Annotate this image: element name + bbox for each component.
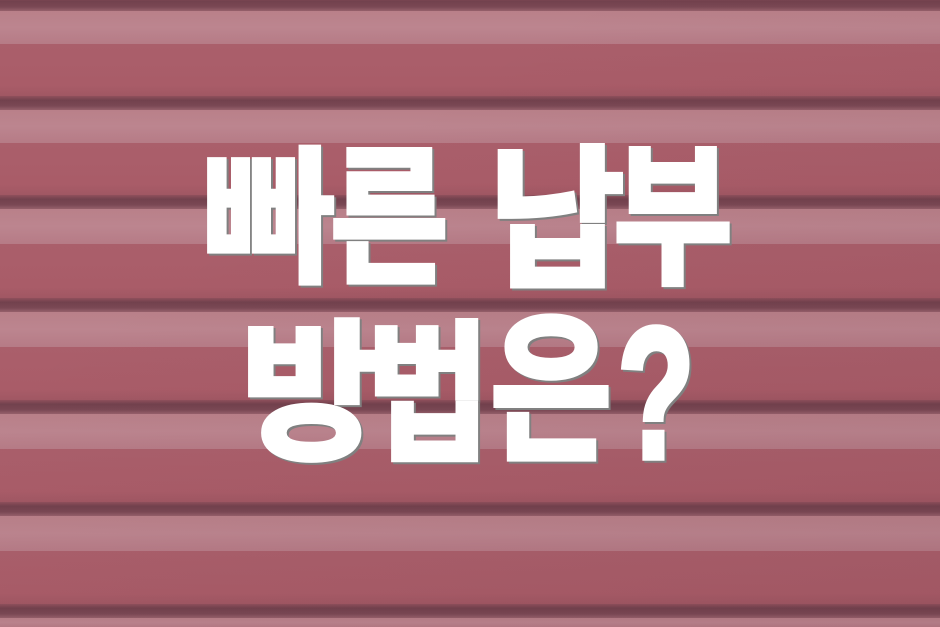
title: 은: [491, 302, 612, 482]
title: ?: [618, 289, 695, 497]
title: 법: [367, 312, 490, 481]
title: 납: [489, 135, 624, 306]
title: 부: [614, 133, 732, 303]
title: 른: [330, 138, 448, 303]
title: 빠: [202, 137, 336, 303]
title: 방: [241, 310, 380, 479]
title: [202, 133, 732, 497]
